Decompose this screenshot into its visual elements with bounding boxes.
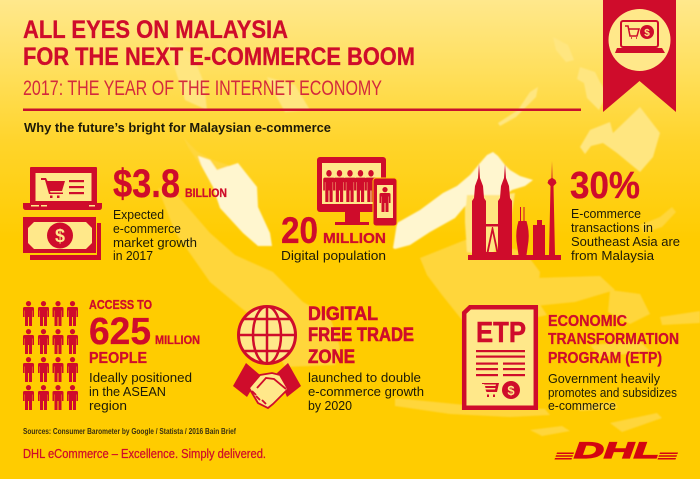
description xyxy=(89,370,192,413)
icon: KL skyline xyxy=(468,161,561,260)
icon: laptop and money: $ xyxy=(55,226,65,246)
description: by 2020 xyxy=(308,398,352,413)
heading: MILLION xyxy=(155,333,200,347)
description: Southeast Asia are xyxy=(571,234,680,249)
value xyxy=(113,162,227,206)
heading xyxy=(89,297,200,367)
value: 20 xyxy=(281,210,318,251)
title: FOR THE NEXT E-COMMERCE BOOM xyxy=(23,43,415,71)
description: transactions in xyxy=(571,220,653,235)
description: Digital population xyxy=(281,248,386,263)
background map xyxy=(158,37,700,436)
header rule xyxy=(23,108,581,111)
stat: market growth xyxy=(23,162,227,263)
DHL logo xyxy=(554,438,678,463)
value: 30% xyxy=(570,165,640,207)
footer tagline: DHL eCommerce – Excellence. Simply delivered. xyxy=(23,447,266,461)
heading: ZONE xyxy=(308,346,355,368)
description: e-commerce xyxy=(113,221,181,236)
heading: PROGRAM (ETP) xyxy=(548,350,662,367)
description xyxy=(548,371,677,413)
heading: ACCESS TO xyxy=(89,297,152,312)
title xyxy=(23,16,415,71)
sources: Sources: Consumer Barometer by Google / Statista / 2016 Bain Brief xyxy=(23,427,236,436)
icon: laptop and money xyxy=(23,167,102,260)
title: ALL EYES ON MALAYSIA xyxy=(23,16,288,44)
description: e-commerce growth xyxy=(308,384,424,399)
heading: TRANSFORMATION xyxy=(548,331,679,348)
stat: digital population xyxy=(281,157,397,263)
description: Ideally positioned xyxy=(89,370,192,385)
DHL logo: DHL xyxy=(574,438,659,463)
stat: transactions share xyxy=(468,161,680,263)
heading: DIGITAL xyxy=(308,303,378,325)
description: in 2017 xyxy=(113,248,153,263)
heading: ECONOMIC xyxy=(548,313,627,330)
description: from Malaysia xyxy=(571,248,655,263)
description: promotes and subsidizes xyxy=(548,385,677,400)
heading xyxy=(548,313,679,367)
icon: ETP document: ETP xyxy=(476,317,526,349)
description xyxy=(113,207,197,263)
map: east Malaysia xyxy=(393,152,533,249)
description xyxy=(571,206,680,263)
description: Government heavily xyxy=(548,371,660,386)
icon: ETP document: $ xyxy=(507,383,515,398)
description: Expected xyxy=(113,207,164,222)
map: peninsular Malaysia xyxy=(198,156,272,246)
description: e-commerce xyxy=(548,398,616,413)
description xyxy=(308,370,424,413)
subtitle: 2017: THE YEAR OF THE INTERNET ECONOMY xyxy=(23,77,382,100)
intro line: Why the future’s bright for Malaysian e-commerce xyxy=(24,120,331,135)
icon: globe and handshake xyxy=(233,306,301,408)
stat: access to people xyxy=(23,297,200,413)
stat: digital free trade zone xyxy=(233,303,424,413)
description: E-commerce xyxy=(571,206,641,221)
value: BILLION xyxy=(185,186,227,200)
ribbon badge xyxy=(603,0,676,112)
value: $3.8 xyxy=(113,162,180,206)
icon: monitor and phone xyxy=(317,157,397,226)
heading: FREE TRADE xyxy=(308,324,414,346)
description: region xyxy=(89,398,127,413)
description: market growth xyxy=(113,235,197,250)
stat: ETP xyxy=(464,307,679,413)
heading: PEOPLE xyxy=(89,350,147,367)
value: MILLION xyxy=(323,231,386,247)
description: in the ASEAN xyxy=(89,384,166,399)
icon: ETP document xyxy=(464,307,536,408)
value xyxy=(281,210,386,251)
icon: laptop with cart: $ xyxy=(644,28,650,39)
icon: people grid xyxy=(23,301,78,410)
description: launched to double xyxy=(308,370,421,385)
heading: 625 xyxy=(89,311,151,353)
heading xyxy=(308,303,414,368)
